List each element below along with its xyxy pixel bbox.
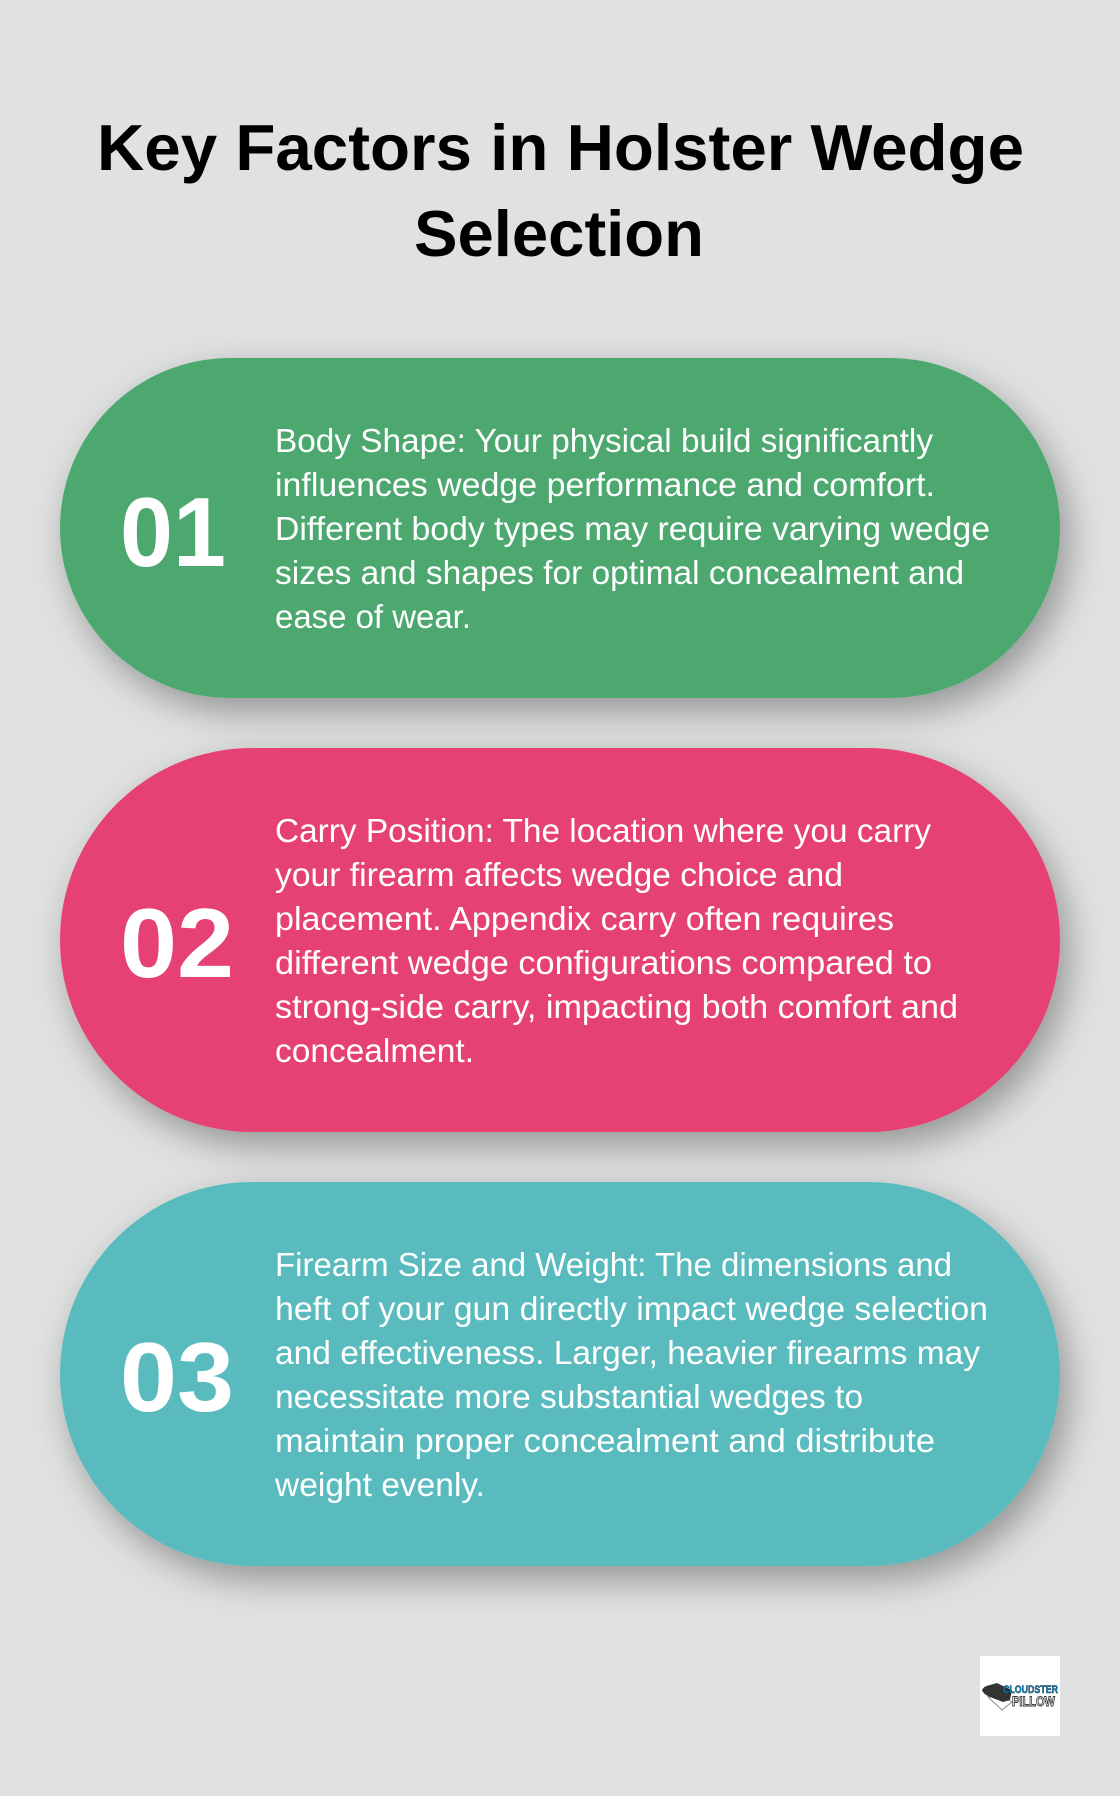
- number 01: 01: [120, 477, 226, 587]
- body shape text: sizes and shapes for optimal concealment and: [275, 554, 964, 591]
- firearm size text: Firearm Size and Weight: The dimensions and: [275, 1246, 952, 1283]
- carry position text: [275, 812, 958, 1069]
- panel: body shape: [60, 358, 1060, 698]
- firearm size text: [274, 1246, 988, 1503]
- green pill background: [60, 358, 1060, 698]
- body shape text: ease of wear.: [275, 598, 471, 635]
- firearm size text: maintain proper concealment and distribute: [275, 1422, 935, 1459]
- firearm size text: heft of your gun directly impact wedge selection: [275, 1290, 988, 1327]
- body shape text: Different body types may require varying wedge: [275, 510, 990, 547]
- number 03: 03: [120, 1322, 234, 1432]
- panel: carry position: [60, 748, 1060, 1132]
- carry position text: placement. Appendix carry often requires: [275, 900, 894, 937]
- body shape text: influences wedge performance and comfort.: [275, 466, 935, 503]
- firearm size text: weight evenly.: [274, 1466, 485, 1503]
- carry position text: Carry Position: The location where you carry: [275, 812, 931, 849]
- logo: Cloudster Pillow: CLOUDSTER: [1003, 1684, 1058, 1696]
- teal pill background: [60, 1182, 1060, 1566]
- firearm size text: necessitate more substantial wedges to: [275, 1378, 863, 1415]
- pink pill background: [60, 748, 1060, 1132]
- carry position text: strong-side carry, impacting both comfort and: [275, 988, 958, 1025]
- body shape text: [275, 422, 990, 635]
- title: Selection: [414, 197, 704, 270]
- logo: Cloudster Pillow: [980, 1656, 1060, 1736]
- title: Key Factors in Holster Wedge: [97, 111, 1024, 184]
- number 02: 02: [120, 888, 234, 998]
- title: [97, 111, 1024, 270]
- firearm size text: and effectiveness. Larger, heavier firearms may: [275, 1334, 980, 1371]
- carry position text: concealment.: [275, 1032, 474, 1069]
- panel: firearm size and weight: [60, 1182, 1060, 1566]
- carry position text: different wedge configurations compared to: [275, 944, 932, 981]
- logo: Cloudster Pillow: PILLOW: [1012, 1693, 1056, 1709]
- carry position text: your firearm affects wedge choice and: [275, 856, 843, 893]
- body shape text: Body Shape: Your physical build significantly: [275, 422, 933, 459]
